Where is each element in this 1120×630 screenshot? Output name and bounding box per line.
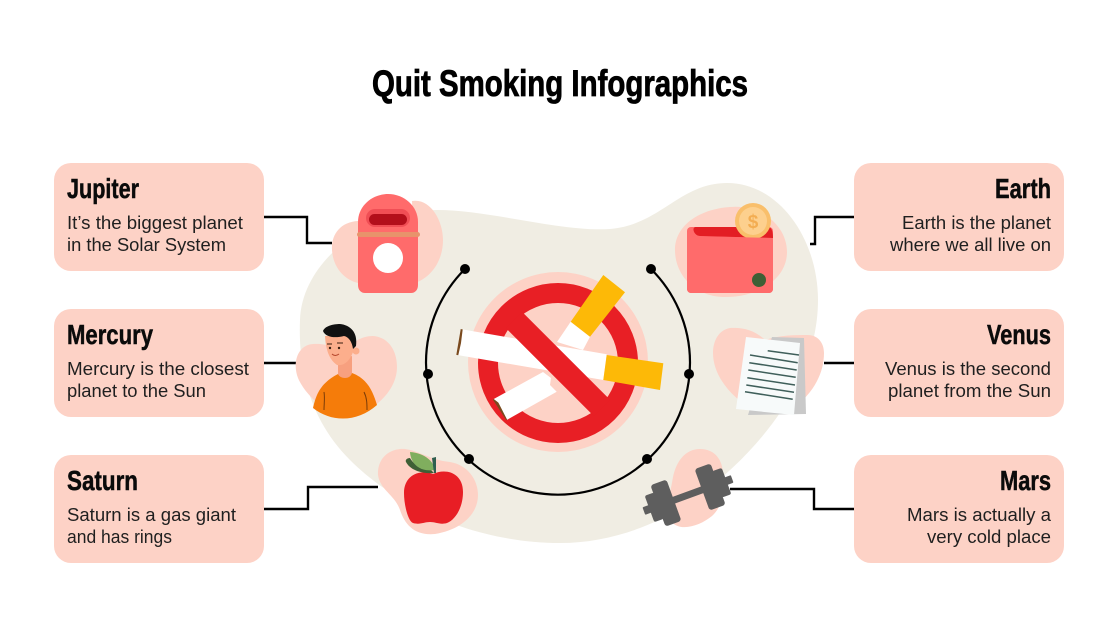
- icon: no smoking sign: [457, 272, 663, 452]
- panel: Mercury: Mercury: [67, 319, 153, 350]
- panel: Mercury: Mercury is the closest: [67, 359, 249, 379]
- panel: Venus: Venus is the second: [885, 359, 1051, 379]
- icon: person: [296, 324, 397, 419]
- panel: Saturn: Saturn: [67, 465, 138, 496]
- cigarette stub: [493, 372, 557, 420]
- central background blob: [300, 183, 818, 543]
- panel: Earth: where we all live on: [889, 235, 1051, 255]
- panel: Saturn: Saturn is a gas giant: [67, 505, 236, 525]
- icon: wallet with coin: $: [748, 212, 759, 233]
- panel: Jupiter: [54, 163, 264, 271]
- panel: Venus: Venus: [987, 319, 1051, 350]
- panel: Mars: [854, 455, 1064, 563]
- panel: Earth: Earth: [995, 173, 1051, 204]
- panel: Jupiter: Jupiter: [67, 173, 139, 204]
- icon: apple: [378, 449, 478, 534]
- panel: Jupiter: in the Solar System: [67, 235, 226, 255]
- panel: Mars: Mars: [1000, 465, 1051, 496]
- panel: Mars: Mars is actually a: [907, 505, 1052, 525]
- panel: Saturn: [54, 455, 264, 563]
- arc with nodes: [423, 264, 694, 495]
- panel: Venus: planet from the Sun: [888, 381, 1051, 401]
- panel: Venus: [854, 309, 1064, 417]
- cigarette long: [457, 329, 663, 390]
- panel: Jupiter: It’s the biggest planet: [67, 213, 243, 233]
- panel: Saturn: and has rings: [67, 527, 172, 547]
- prohibition bar: [514, 320, 602, 408]
- icon: dumbbell: [636, 449, 740, 532]
- icon: wallet with coin: [675, 203, 787, 297]
- panel: Mercury: [54, 309, 264, 417]
- panel: Earth: Earth is the planet: [902, 213, 1051, 233]
- icon: mailbox: [332, 194, 443, 293]
- panel: Earth: [854, 163, 1064, 271]
- cigarette upper: [557, 275, 625, 350]
- connector lines: [264, 217, 854, 509]
- panel: Mercury: planet to the Sun: [67, 381, 206, 401]
- title: Quit Smoking Infographics: [372, 63, 748, 104]
- panel: Mars: very cold place: [927, 527, 1051, 547]
- icon: notes: [713, 328, 824, 415]
